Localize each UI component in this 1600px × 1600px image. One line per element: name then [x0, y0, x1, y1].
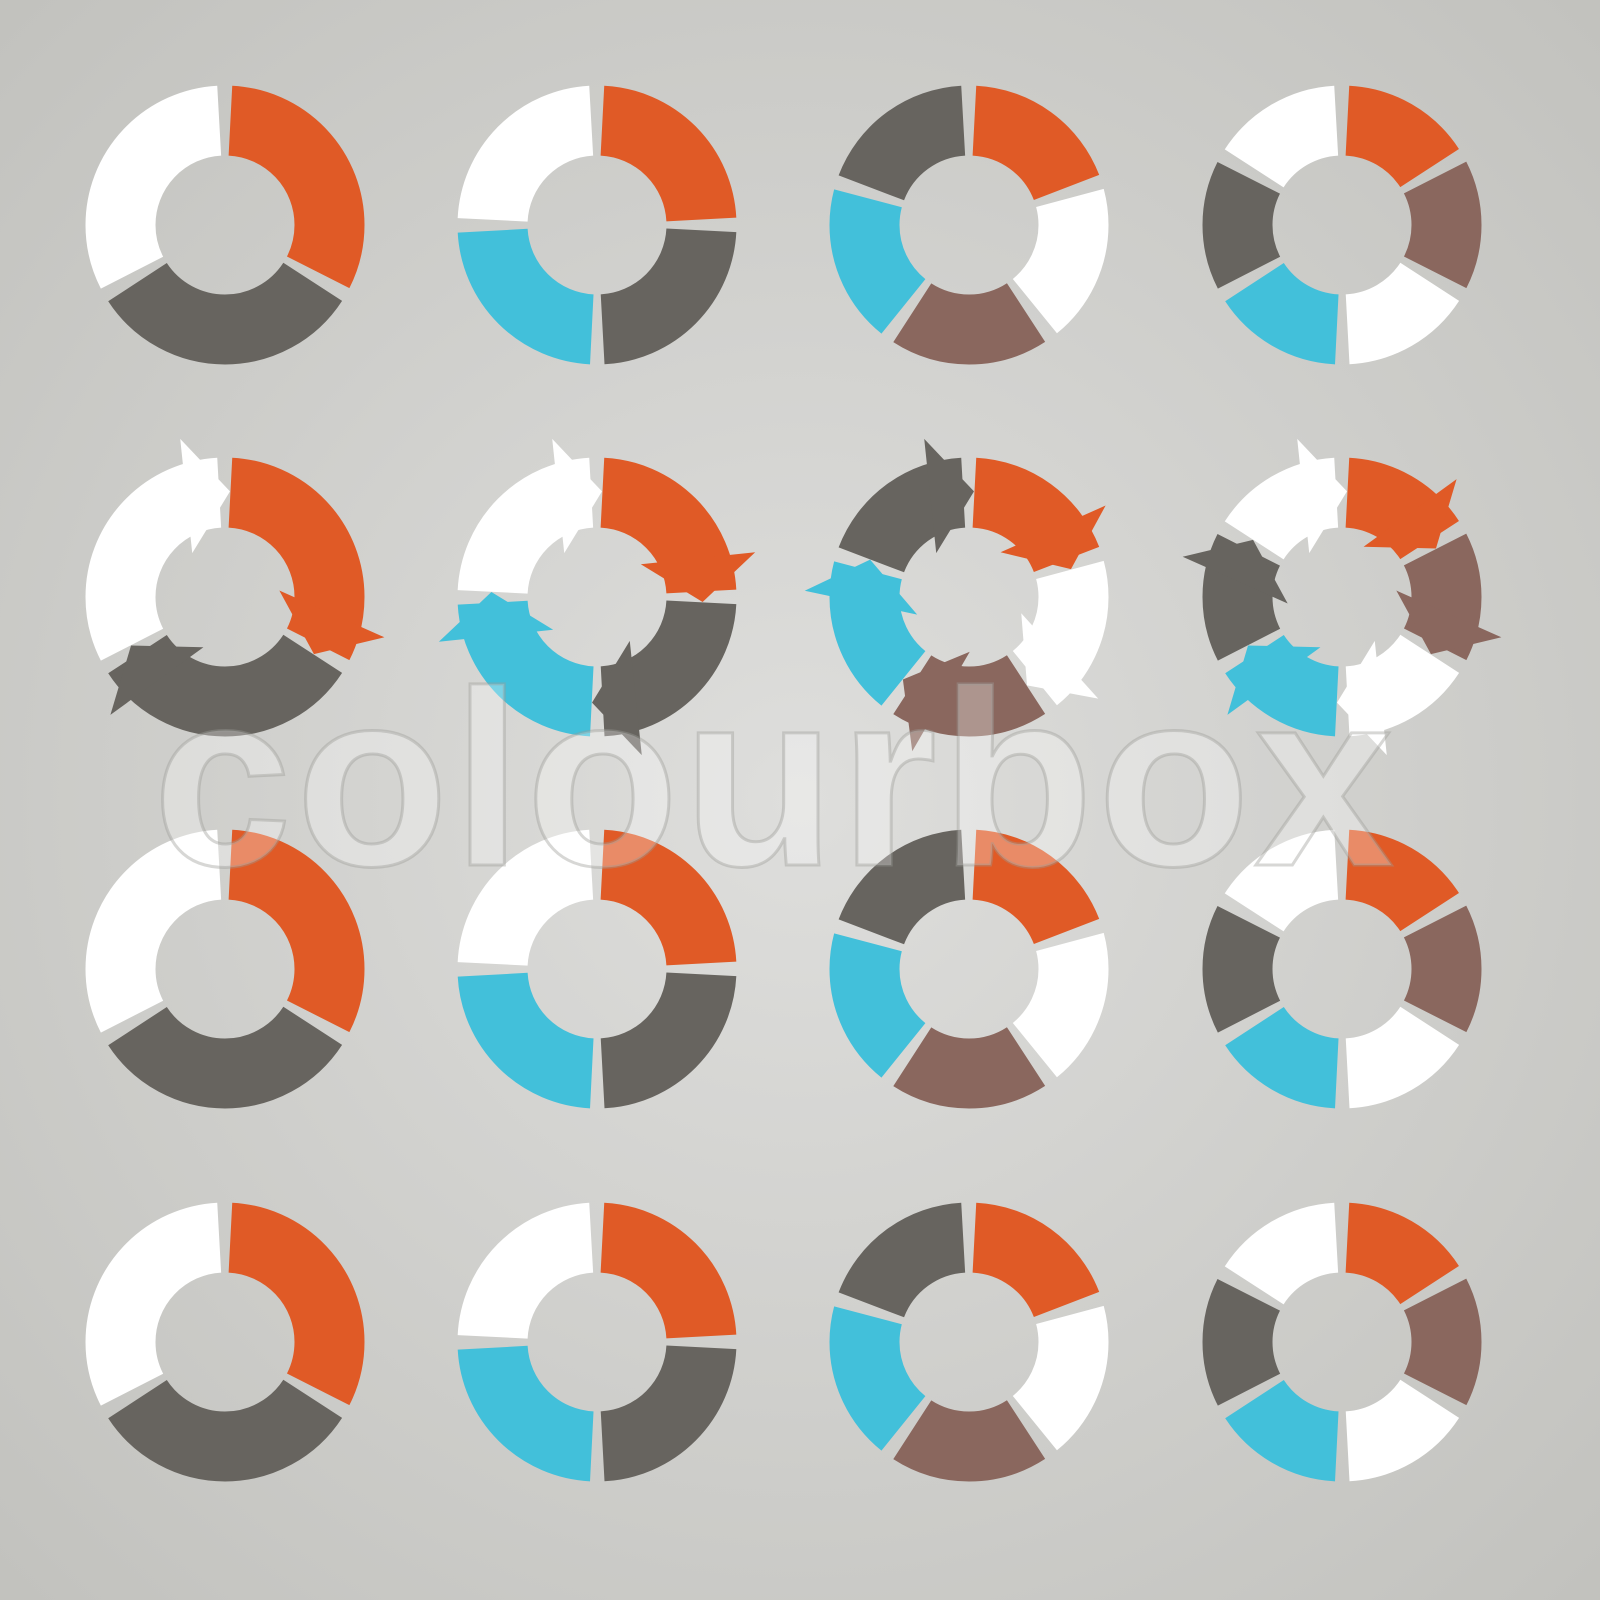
donut 6 segments r3	[1238, 864, 1446, 1074]
donut 4 segments r1	[492, 120, 702, 330]
row 3: rounded segment donuts	[120, 864, 1446, 1074]
arrow cycle 3 segments	[85, 434, 384, 715]
watermark: colourbox	[153, 639, 1397, 918]
arrow cycle 6 segments	[1183, 434, 1501, 760]
row 2: arrow cycle donuts	[85, 434, 1501, 760]
donut 4 segments r3	[492, 864, 702, 1074]
donut 5 segments r4	[864, 1238, 1074, 1446]
donut 3 segments r1	[120, 120, 330, 330]
donut 6 segments r4	[1238, 1238, 1446, 1446]
donut 3 segments r4	[120, 1238, 330, 1446]
row 4: plain segment donuts	[120, 1238, 1446, 1446]
arrow cycle 4 segments	[434, 434, 760, 760]
donut 5 segments r3	[864, 864, 1074, 1074]
donut 6 segments r1	[1238, 120, 1446, 330]
row 1: arrow-notched cycle donuts	[120, 120, 1446, 330]
donut 4 segments r4	[492, 1238, 702, 1446]
donut 3 segments r3	[120, 864, 330, 1074]
donut 5 segments r1	[864, 120, 1074, 330]
arrow cycle 5 segments	[805, 434, 1124, 751]
